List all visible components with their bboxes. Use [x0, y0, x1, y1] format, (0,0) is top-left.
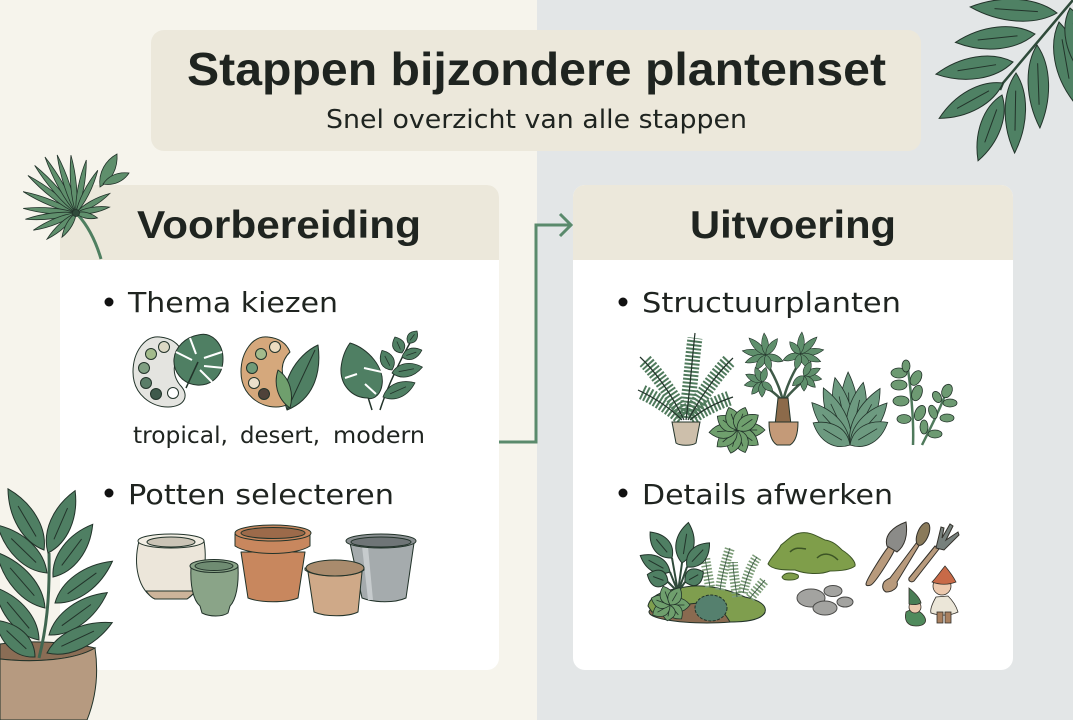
icon: potted plant bottom left — [0, 483, 119, 720]
arrow: from Voorbereiding to Uitvoering — [499, 214, 571, 442]
big leaf plant — [636, 521, 716, 592]
mound — [648, 586, 765, 623]
pot: cream — [137, 534, 205, 599]
icon: structural plants — [638, 332, 957, 455]
icon: palette with leaves (desert) — [241, 337, 319, 410]
theme labels: modern — [333, 423, 425, 449]
spoon — [883, 521, 933, 592]
icon: leaf branch top right — [934, 0, 1073, 164]
fork — [909, 524, 959, 582]
icon: garden tools — [866, 521, 959, 592]
icon: palette with monstera (tropical) — [133, 334, 224, 407]
heading: Uitvoering: Uitvoering — [690, 204, 896, 247]
trowel — [866, 522, 907, 586]
title: Stappen bijzondere plantenset — [187, 43, 886, 95]
plant: succulent — [708, 405, 765, 455]
bullet: Thema kiezen: Thema kiezen — [127, 286, 338, 319]
icon: monstera and branch (modern) — [341, 328, 424, 410]
pot: tan — [305, 560, 364, 616]
panel: Uitvoering — [573, 185, 1013, 670]
plant: branches — [891, 360, 957, 445]
pot: green — [190, 560, 238, 616]
icon: stones — [797, 586, 853, 615]
bullet: Structuurplanten: Structuurplanten — [642, 286, 901, 319]
theme labels: tropical, — [133, 423, 228, 449]
fern fronds — [705, 548, 765, 598]
gnome: boy — [905, 588, 926, 626]
theme labels: desert, — [240, 423, 320, 449]
icon: fan palm top left — [22, 154, 129, 259]
icon: gnomes — [905, 566, 958, 626]
pot soil — [0, 642, 95, 661]
icon: five pots — [137, 525, 416, 616]
heading: Voorbereiding: Voorbereiding — [137, 204, 421, 247]
pot: terracotta — [235, 525, 311, 602]
icon: terrarium details — [636, 521, 765, 623]
bullet: Details afwerken: Details afwerken — [642, 478, 893, 511]
icon: moss pile — [768, 533, 855, 580]
pot body — [0, 648, 97, 720]
plant: fern in pot — [638, 333, 733, 445]
bullet: Potten selecteren: Potten selecteren — [128, 478, 394, 511]
plant: palm — [742, 332, 824, 445]
pot: grey metal — [346, 534, 416, 602]
star plant — [649, 584, 690, 623]
theme labels — [133, 423, 425, 449]
subtitle: Snel overzicht van alle stappen — [326, 105, 747, 135]
panel: Voorbereiding — [60, 185, 499, 670]
round plant — [695, 595, 727, 621]
background left — [0, 0, 537, 720]
gnome: girl — [931, 566, 958, 623]
background right — [537, 0, 1073, 720]
title block — [151, 30, 921, 151]
plant: agave — [805, 372, 894, 453]
